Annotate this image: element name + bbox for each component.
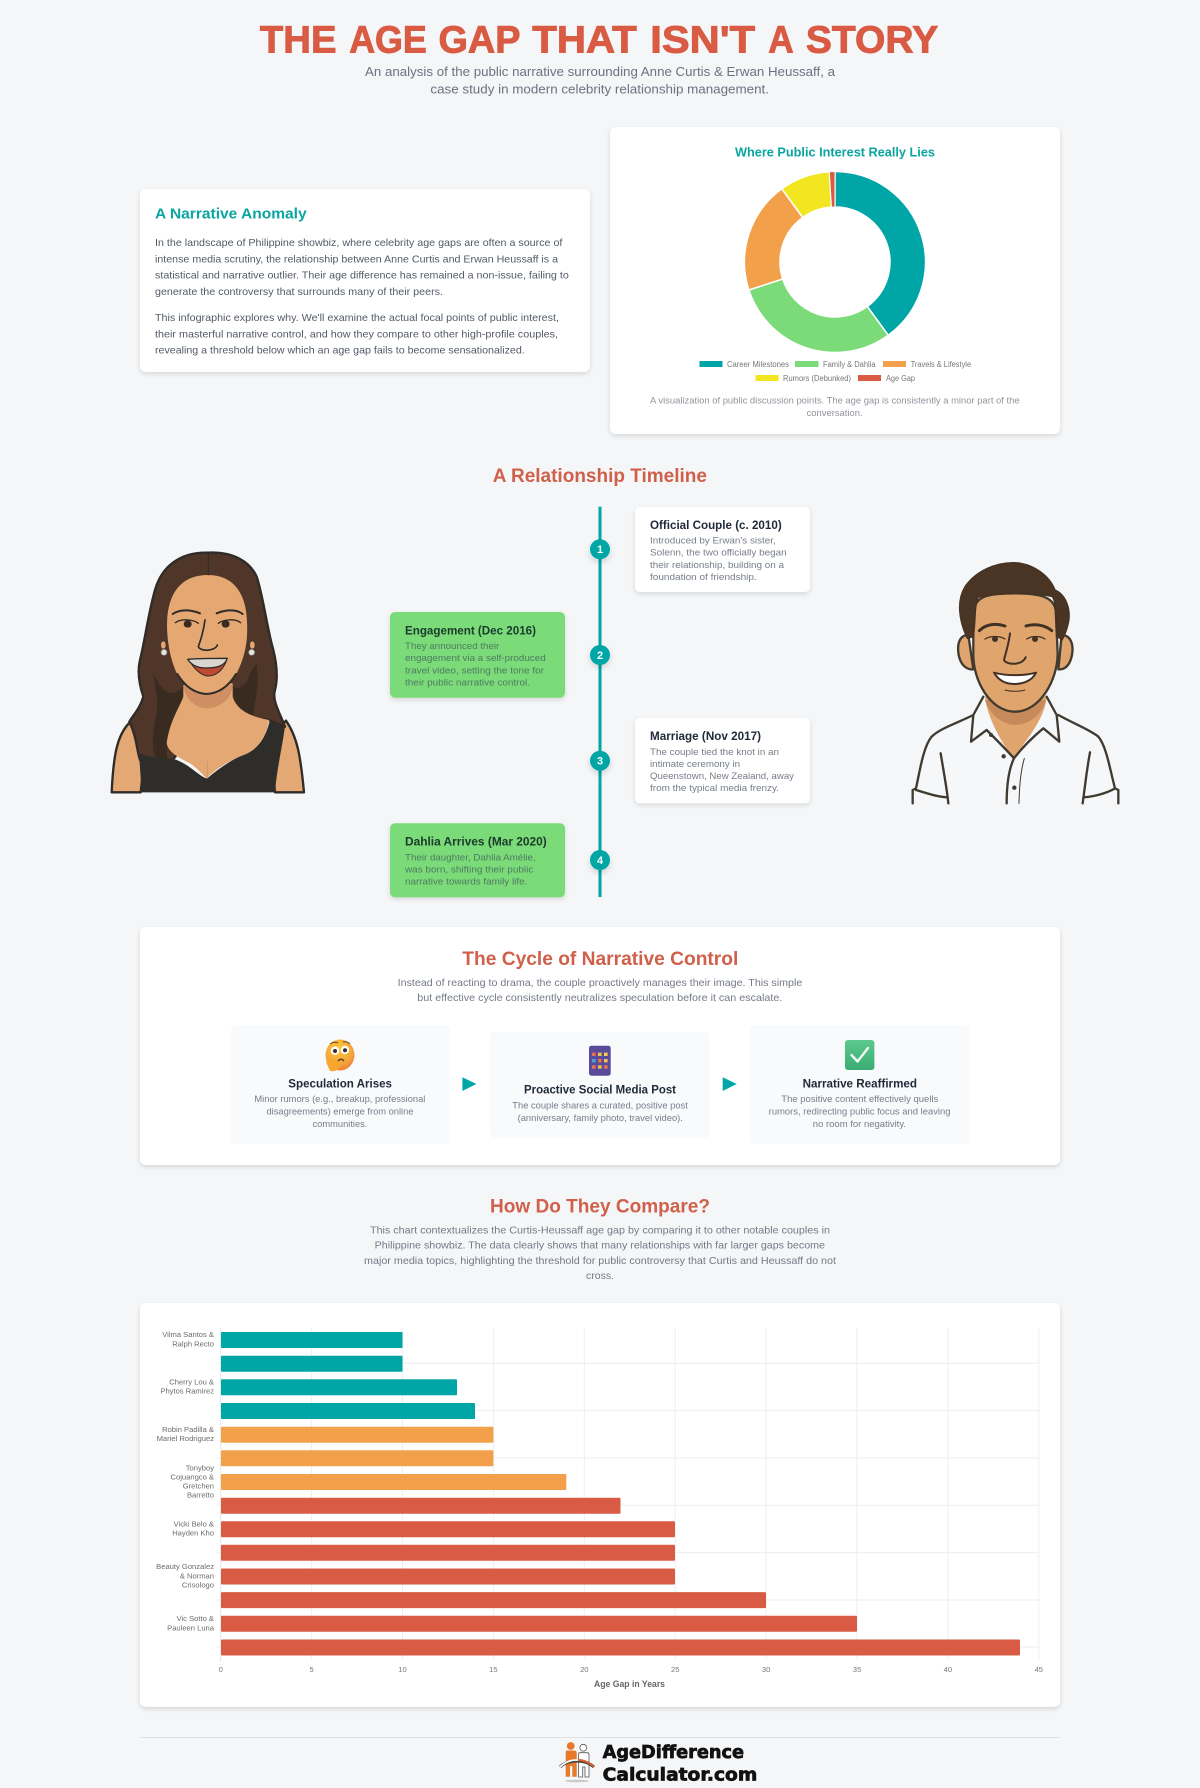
step 2: proactive social media post: The couple shares a curated, positive post [512, 1099, 688, 1110]
event 2: engagement: travel video, setting the tone for [405, 664, 544, 675]
timeline [390, 507, 810, 897]
category labels: Barretto [187, 1490, 214, 1499]
category labels: Crisologo [182, 1580, 214, 1589]
category labels: Ralph Recto [172, 1339, 214, 1348]
text block: intro paragraphs: statistical and narrative outlier. Their age difference has remained a non-issue, failing to [155, 271, 569, 282]
x axis ticks: 40 [944, 1665, 952, 1674]
donut chart [744, 172, 925, 353]
title: AGE [349, 19, 427, 61]
x axis ticks: 25 [671, 1665, 679, 1674]
category labels: Cojuangco & [171, 1472, 214, 1481]
heading: chart title: Where Public Interest Really Lies [735, 144, 935, 160]
x axis ticks: 35 [853, 1665, 861, 1674]
step 1: speculation arises: Speculation Arises [288, 1077, 392, 1090]
category labels: Vic Sotto & [177, 1614, 214, 1623]
text block: compare intro: Philippine showbiz. The data clearly shows that many relationships with far larger gaps become [375, 1240, 825, 1252]
marker 1 [590, 539, 610, 559]
legend: Travels & Lifestyle [911, 360, 972, 369]
panel: where public interest really lies [610, 127, 1060, 434]
icon: age difference logo [560, 1742, 594, 1782]
marker 3: 3 [597, 756, 603, 768]
text block: cycle intro [398, 978, 803, 1004]
title: ISN'T [650, 19, 755, 61]
event 1: official couple: foundation of friendship. [650, 571, 757, 582]
x axis title: Age Gap in Years [594, 1679, 665, 1689]
step 2: proactive social media post: (anniversary, family photo, travel video). [518, 1112, 683, 1123]
marker 2: 2 [597, 650, 603, 662]
title: STORY [806, 19, 938, 61]
x axis ticks [219, 1665, 1043, 1674]
x axis ticks: 30 [762, 1665, 770, 1674]
footer [140, 1737, 1060, 1786]
chart caption: A visualization of public discussion points. The age gap is consistently a minor part of the [650, 394, 1020, 406]
event 1: official couple: Solenn, the two officially began [650, 547, 787, 558]
icon: thinking face [326, 1040, 354, 1071]
x axis ticks: 15 [489, 1665, 498, 1674]
logo wordmark: Calculator.com [603, 1766, 757, 1786]
x axis ticks: 5 [309, 1665, 314, 1674]
event 4: dahlia arrives [390, 823, 565, 897]
category labels: Cherry Lou & [169, 1378, 214, 1387]
event 2: engagement [390, 612, 565, 698]
event 4: dahlia arrives: Their daughter, Dahlia Amélie, [405, 851, 536, 862]
marker 3 [590, 751, 610, 771]
portrait: erwan heussaff [913, 563, 1118, 803]
category labels: Hayden Kho [172, 1528, 214, 1537]
category labels [156, 1330, 215, 1632]
category labels: Beauty Gonzalez [156, 1562, 214, 1571]
title: A [768, 19, 794, 61]
step 2: proactive social media post [490, 1032, 710, 1138]
category labels: Pauleen Luna [167, 1623, 215, 1632]
event 3: marriage [635, 718, 810, 803]
event 3: marriage: Marriage (Nov 2017) [650, 729, 761, 743]
heading: cycle: The Cycle of Narrative Control [462, 949, 738, 970]
x axis ticks: 20 [580, 1665, 589, 1674]
marker 4: 4 [597, 855, 604, 867]
step 3: narrative reaffirmed: no room for negativity. [813, 1118, 906, 1129]
text block: compare intro: major media topics, highlighting the threshold for public controversy that Curtis and Heussaff do not [364, 1256, 836, 1267]
text block: compare intro [364, 1226, 836, 1282]
step 2: proactive social media post: Proactive Social Media Post [524, 1083, 676, 1096]
category labels: & Norman [180, 1571, 214, 1580]
legend: Career Milestones [727, 360, 789, 369]
arrow 2 [723, 1077, 737, 1091]
panel: the cycle of narrative control [140, 927, 1060, 1165]
logo wordmark: AgeDifference [603, 1743, 744, 1763]
event 4: dahlia arrives: narrative towards family life. [405, 876, 527, 887]
text block: intro paragraphs: intense media scrutiny, the relationship between Anne Curtis and Erwan Heussaff is a [155, 254, 558, 265]
event 2: engagement: They announced their [405, 640, 499, 651]
step 3: narrative reaffirmed: Narrative Reaffirmed [803, 1077, 917, 1090]
category labels: Gretchen [183, 1481, 214, 1490]
icon: phone [589, 1046, 611, 1076]
legend: Age Gap [886, 374, 916, 383]
text block: intro paragraphs: revealing a threshold below which an age gap fails to become sensationalized. [155, 346, 525, 357]
marker 4 [590, 850, 610, 870]
legend [700, 360, 972, 383]
text block: cycle intro: but effective cycle consistently neutralizes speculation before it can escalate. [417, 993, 782, 1004]
step 1: speculation arises: disagreements) emerge from online [266, 1105, 414, 1116]
event 2: engagement: their public narrative control. [405, 677, 530, 688]
step 3: narrative reaffirmed: rumors, redirecting public focus and leaving [769, 1105, 950, 1116]
text block: intro paragraphs: This infographic explores why. We'll examine the actual focal points of public interest, [155, 313, 559, 324]
title: THAT [532, 19, 637, 61]
legend: Family & Dahlia [823, 360, 876, 369]
subtitle: case study in modern celebrity relationship management. [430, 82, 769, 96]
subtitle: An analysis of the public narrative surrounding Anne Curtis & Erwan Heussaff, a [365, 64, 836, 79]
chart grid [217, 1328, 1039, 1662]
x axis ticks: 0 [219, 1665, 223, 1674]
arrow 1 [462, 1077, 476, 1091]
chart caption: conversation. [807, 407, 863, 418]
text block: cycle intro: Instead of reacting to drama, the couple proactively manages their image. This simple [398, 978, 803, 989]
heading: a relationship timeline: A Relationship Timeline [493, 466, 707, 487]
step 1: speculation arises: Minor rumors (e.g., breakup, professional [254, 1093, 425, 1104]
event 1: official couple: Introduced by Erwan's sister, [650, 534, 776, 546]
category labels: Robin Padilla & [162, 1425, 214, 1434]
chart caption [650, 394, 1020, 418]
title [260, 19, 938, 61]
heading: how do they compare: How Do They Compare? [490, 1197, 710, 1218]
panel: a narrative anomaly [140, 189, 590, 372]
category labels: Mariel Rodriguez [157, 1434, 214, 1443]
subtitle [365, 64, 836, 96]
category labels: Phytos Ramirez [160, 1386, 214, 1395]
step 1: speculation arises: communities. [313, 1118, 367, 1129]
text block: compare intro: cross. [586, 1271, 614, 1282]
category labels: Tonyboy [186, 1463, 214, 1472]
x axis ticks: 10 [398, 1665, 407, 1674]
title: GAP [438, 19, 520, 61]
step 3: narrative reaffirmed: The positive content effectively quells [781, 1093, 939, 1104]
category labels: Vilma Santos & [162, 1330, 214, 1339]
text block: intro paragraphs: In the landscape of Philippine showbiz, where celebrity age gaps are often a source of [155, 238, 563, 249]
icon: check mark [845, 1040, 874, 1070]
event 3: marriage: The couple tied the knot in an [650, 746, 779, 757]
timeline spine [598, 507, 602, 897]
heading: a narrative anomaly: A Narrative Anomaly [155, 206, 307, 222]
portrait: anne curtis [112, 553, 304, 792]
event 4: dahlia arrives: Dahlia Arrives (Mar 2020) [405, 835, 547, 849]
category labels: Vicki Belo & [174, 1520, 214, 1529]
event 2: engagement: Engagement (Dec 2016) [405, 623, 536, 637]
text block: intro paragraphs: generate the controversy that surrounds many of their peers. [155, 287, 443, 298]
event 3: marriage: Queenstown, New Zealand, away [650, 770, 794, 781]
event 1: official couple: their relationship, building on a [650, 559, 785, 570]
marker 2 [590, 645, 610, 665]
event 4: dahlia arrives: was born, shifting their public [404, 863, 534, 874]
title: THE [260, 19, 336, 61]
event 1: official couple [635, 507, 810, 592]
x axis ticks: 45 [1035, 1665, 1043, 1674]
event 3: marriage: from the typical media frenzy. [650, 782, 779, 793]
legend: Rumors (Debunked) [783, 374, 851, 383]
panel: age gap bar chart [140, 1303, 1060, 1707]
text block: intro paragraphs [155, 238, 569, 357]
step 1: speculation arises [231, 1025, 450, 1144]
step 3: narrative reaffirmed [750, 1025, 969, 1144]
logo wordmark [603, 1743, 757, 1786]
bars [221, 1332, 1020, 1656]
event 2: engagement: engagement via a self-produced [405, 652, 546, 663]
marker 1: 1 [597, 544, 603, 556]
text block: intro paragraphs: their masterful narrative control, and how they compare to other high-profile couples, [155, 329, 558, 340]
event 1: official couple: Official Couple (c. 2010) [650, 518, 782, 532]
event 3: marriage: intimate ceremony in [650, 758, 740, 769]
text block: compare intro: This chart contextualizes the Curtis-Heussaff age gap by comparing it to other notable couples in [370, 1226, 830, 1236]
